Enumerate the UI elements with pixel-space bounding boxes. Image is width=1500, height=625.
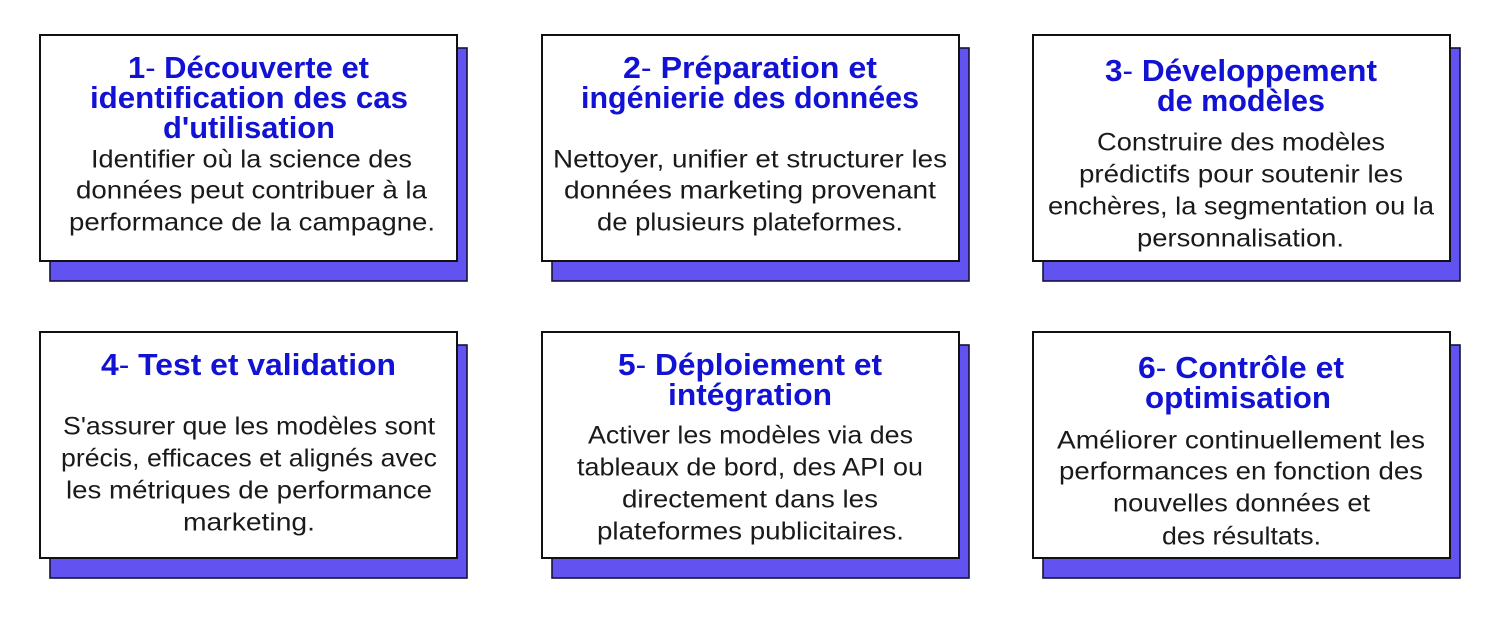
card 2 heading: ingénierie des données bbox=[581, 80, 919, 115]
card 2 body text bbox=[553, 146, 947, 236]
card 5 heading: intégration bbox=[668, 377, 832, 412]
card 5 heading: 5- Déploiement et bbox=[618, 347, 882, 382]
card 3: model development bbox=[1033, 35, 1460, 281]
card 2 heading: 2- Préparation et bbox=[623, 50, 877, 85]
card 3 body text: enchères, la segmentation ou la bbox=[1048, 192, 1434, 220]
card 1 heading bbox=[90, 50, 408, 145]
card 1 heading: d'utilisation bbox=[163, 110, 335, 145]
card 6 body text: nouvelles données et bbox=[1113, 490, 1370, 518]
card 1 body text bbox=[69, 146, 435, 236]
card 3 body text: personnalisation. bbox=[1137, 224, 1344, 252]
card 2 shadow bbox=[552, 48, 969, 281]
card 1 panel bbox=[40, 35, 457, 261]
card 5 body text bbox=[577, 422, 923, 546]
card 2 body text: Nettoyer, unifier et structurer les bbox=[553, 146, 947, 174]
card 6 panel bbox=[1033, 332, 1450, 558]
card 5 body text: directement dans les bbox=[622, 486, 878, 514]
card 5 body text: Activer les modèles via des bbox=[588, 422, 913, 450]
card 1 body text: données peut contribuer à la bbox=[76, 176, 427, 204]
card 4 body text bbox=[61, 412, 437, 536]
card 5 heading bbox=[618, 347, 882, 412]
card 5 body text: tableaux de bord, des API ou bbox=[577, 454, 923, 482]
card 6 body text: Améliorer continuellement les bbox=[1057, 426, 1425, 454]
card 2 body text: données marketing provenant bbox=[564, 176, 936, 204]
card 6 body text bbox=[1057, 426, 1425, 550]
card 4 body text: les métriques de performance bbox=[66, 476, 432, 504]
card 4 heading: 4- Test et validation bbox=[101, 347, 396, 382]
card 6 shadow bbox=[1043, 345, 1460, 578]
card 6 body text: des résultats. bbox=[1162, 522, 1321, 550]
card 3 shadow bbox=[1043, 48, 1460, 281]
card 1 heading: 1- Découverte et bbox=[128, 50, 369, 85]
card 3 body text: Construire des modèles bbox=[1097, 128, 1385, 156]
card 1 heading: identification des cas bbox=[90, 80, 408, 115]
card 4 body text: marketing. bbox=[183, 508, 315, 536]
card 6 heading: 6- Contrôle et bbox=[1138, 350, 1344, 385]
card 2 heading bbox=[581, 50, 919, 115]
card 4 panel bbox=[40, 332, 457, 558]
card 4 body text: S'assurer que les modèles sont bbox=[63, 412, 435, 440]
card 2: data preparation bbox=[542, 35, 969, 281]
card 3 panel bbox=[1033, 35, 1450, 261]
card 1 body text: performance de la campagne. bbox=[69, 208, 435, 236]
card 3 body text: prédictifs pour soutenir les bbox=[1079, 160, 1403, 188]
card 4 body text: précis, efficaces et alignés avec bbox=[61, 444, 437, 472]
card 3 body text bbox=[1048, 128, 1434, 252]
card 6 body text: performances en fonction des bbox=[1059, 458, 1423, 486]
card 1 body text: Identifier où la science des bbox=[91, 146, 412, 174]
card 6 heading bbox=[1138, 350, 1344, 415]
card 2 panel bbox=[542, 35, 959, 261]
card 4 shadow bbox=[50, 345, 467, 578]
card 4: test and validation bbox=[40, 332, 467, 578]
card 1 shadow bbox=[50, 48, 467, 281]
card 5 shadow bbox=[552, 345, 969, 578]
card 6 heading: optimisation bbox=[1145, 380, 1331, 415]
card 3 heading: 3- Développement bbox=[1105, 53, 1377, 88]
card 1: discovery bbox=[40, 35, 467, 281]
card 3 heading bbox=[1105, 53, 1377, 118]
card 5: deployment and integration bbox=[542, 332, 969, 578]
card 6: monitoring and optimisation bbox=[1033, 332, 1460, 578]
card 2 body text: de plusieurs plateformes. bbox=[597, 208, 903, 236]
card 5 body text: plateformes publicitaires. bbox=[597, 518, 904, 546]
card 5 panel bbox=[542, 332, 959, 558]
card 3 heading: de modèles bbox=[1157, 83, 1325, 118]
